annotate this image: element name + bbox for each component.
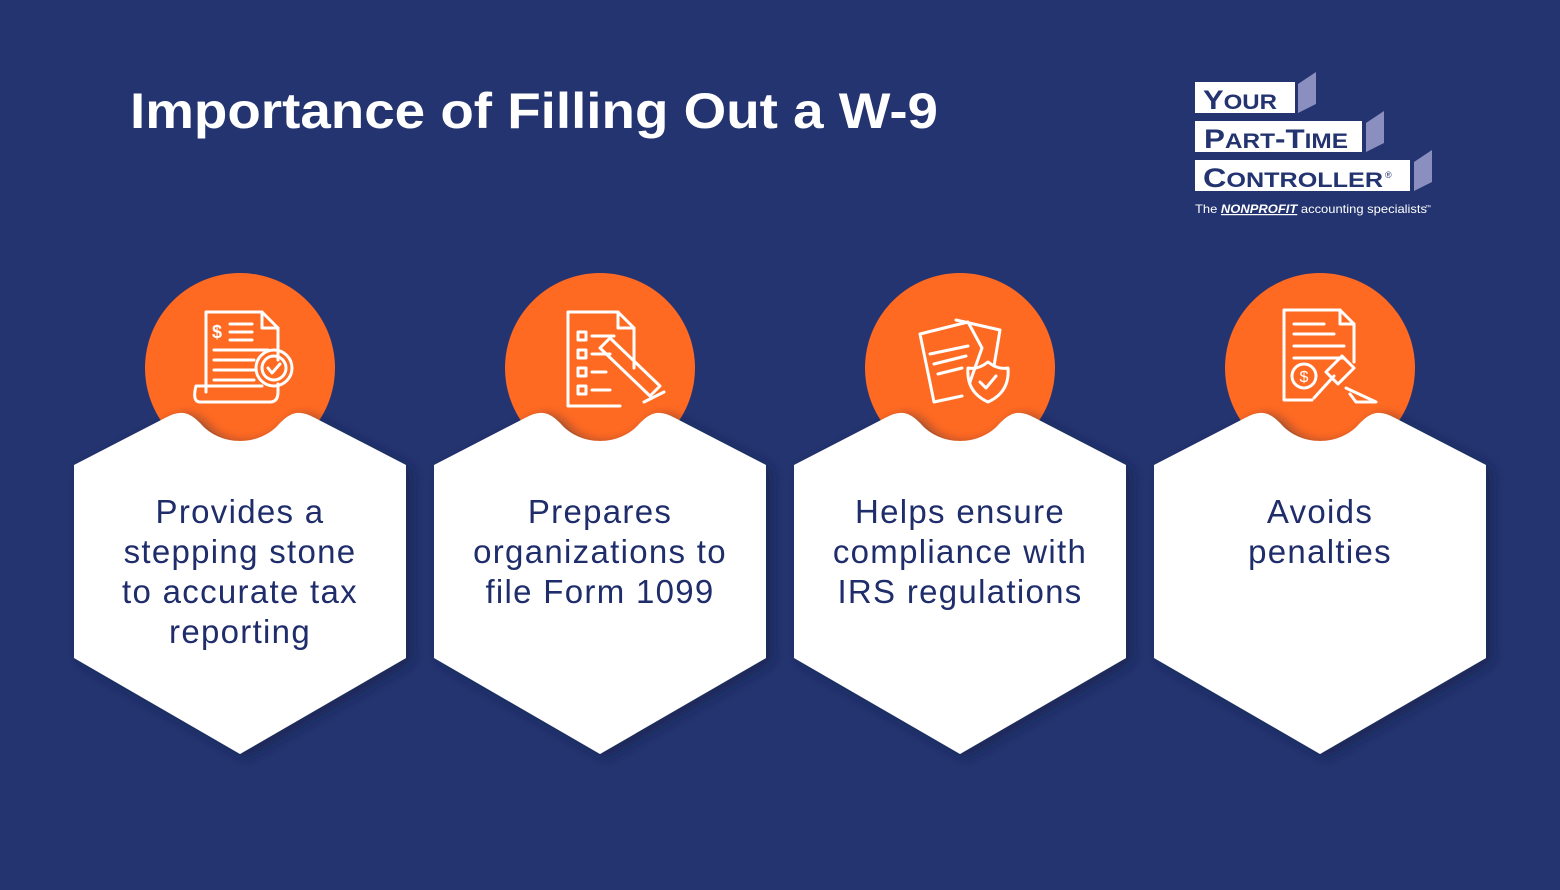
title: Importance of Filling Out a W-9 — [130, 83, 938, 139]
panel: card 3 — [794, 273, 1126, 754]
text: card 4: Avoids — [1267, 493, 1373, 530]
icon: document with gavel: $ — [1300, 369, 1309, 386]
logo — [1195, 72, 1432, 216]
logo: ™ — [1425, 204, 1431, 211]
text: card 2: file Form 1099 — [485, 573, 715, 610]
text: card 1: Provides a — [156, 493, 324, 530]
icon: checklist with pencil — [568, 312, 664, 406]
text: card 3: IRS regulations — [837, 573, 1083, 610]
logo: CONTROLLER — [1203, 163, 1383, 193]
panel: card 2 — [434, 273, 766, 754]
logo: The NONPROFIT accounting specialists — [1195, 202, 1427, 216]
text: card 2: Prepares — [528, 493, 672, 530]
logo: PART -TIME — [1204, 124, 1348, 154]
panel: card 1 — [74, 273, 406, 754]
panel: card 4 — [1154, 273, 1486, 754]
text: card 3: Helps ensure — [855, 493, 1065, 530]
text: card 4: penalties — [1248, 533, 1392, 570]
text: card 2: organizations to — [473, 533, 727, 570]
text: card 1: to accurate tax — [122, 573, 358, 610]
logo: YOUR — [1203, 85, 1277, 115]
icon: receipt: $ — [212, 322, 222, 342]
icon: receipt — [195, 312, 292, 402]
icon: documents with shield — [920, 320, 1008, 402]
text: card 3: compliance with — [833, 533, 1087, 570]
text: card 1: reporting — [169, 613, 311, 650]
logo: ® — [1385, 170, 1392, 180]
text: card 1: stepping stone — [124, 533, 356, 570]
icon: document with gavel — [1284, 310, 1376, 402]
